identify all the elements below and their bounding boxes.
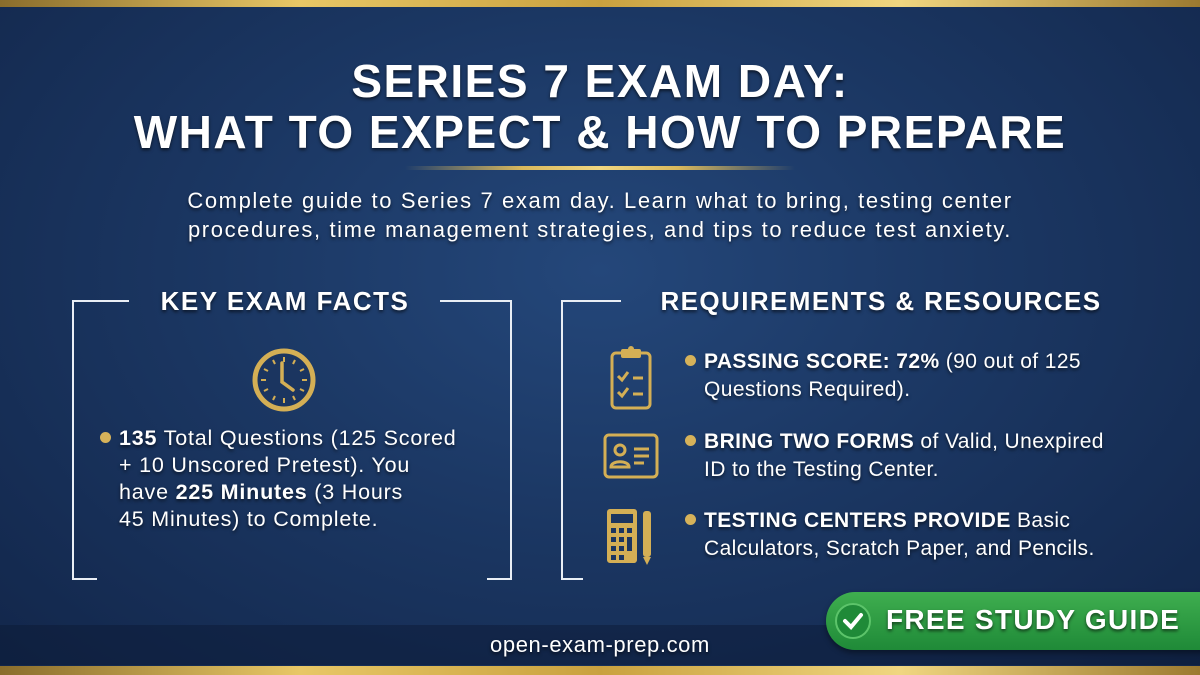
footer band	[0, 625, 1200, 665]
subtitle: procedures, time management strategies, and tips to reduce test anxiety.	[188, 217, 1012, 242]
icon: calculator and pencil	[607, 509, 651, 565]
badge: free study guide: FREE STUDY GUIDE	[886, 604, 1180, 635]
icon: clipboard	[610, 346, 652, 410]
text: exam facts	[100, 426, 457, 533]
top gold bar	[0, 0, 1200, 7]
item: ID	[604, 430, 1104, 484]
panel: requirements & resources	[561, 286, 1104, 580]
icon: check	[835, 603, 871, 639]
title underline	[405, 166, 795, 170]
item: ID: BRING TWO FORMS of Valid, Unexpired	[704, 430, 1104, 453]
icon: ID card	[604, 434, 658, 478]
subtitle	[187, 188, 1013, 245]
item: passing score: PASSING SCORE: 72% (90 out of 125	[704, 350, 1081, 373]
item: calculators: Calculators, Scratch Paper, and Pencils.	[704, 537, 1095, 560]
item: passing score	[610, 346, 1081, 410]
icon: clock	[252, 348, 316, 412]
title: SERIES 7 EXAM DAY:	[351, 55, 849, 107]
heading: key exam facts: KEY EXAM FACTS	[161, 286, 409, 316]
bottom gold bar	[0, 666, 1200, 675]
title	[133, 55, 1066, 158]
subtitle: Complete guide to Series 7 exam day. Learn what to bring, testing center	[187, 188, 1013, 213]
item: calculators: TESTING CENTERS PROVIDE Basic	[704, 509, 1070, 532]
footer url: open-exam-prep.com	[490, 632, 710, 657]
text: exam facts: + 10 Unscored Pretest). You	[119, 453, 410, 477]
item: calculators	[607, 509, 1095, 565]
text: exam facts: 135 Total Questions (125 Scored	[119, 426, 457, 450]
item: passing score: Questions Required).	[704, 378, 910, 401]
panel: key exam facts	[72, 286, 512, 580]
text: exam facts: 45 Minutes) to Complete.	[119, 507, 378, 531]
text: exam facts: have 225 Minutes (3 Hours	[119, 480, 403, 504]
badge: free study guide	[826, 592, 1200, 650]
item: ID: ID to the Testing Center.	[704, 458, 939, 481]
heading: requirements: REQUIREMENTS & RESOURCES	[660, 286, 1101, 316]
title: WHAT TO EXPECT & HOW TO PREPARE	[134, 106, 1066, 158]
